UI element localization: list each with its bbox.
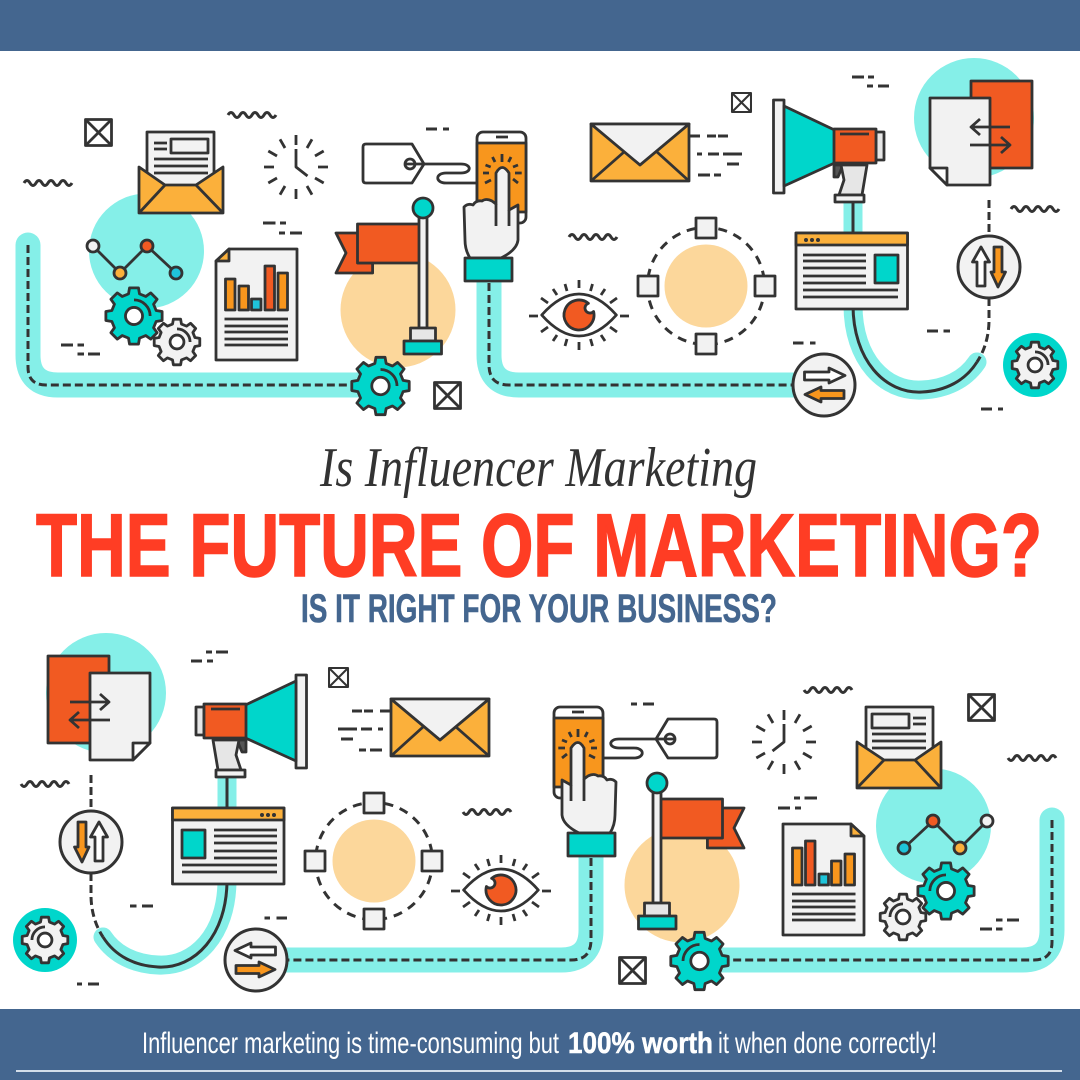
top banner: [0, 0, 1080, 51]
icon: eye: [529, 280, 629, 350]
bottom illustration, mirrored: [13, 633, 1056, 991]
middle connector path: [489, 275, 800, 385]
icon: large teal gear: [106, 288, 162, 344]
bottom banner: [0, 1009, 1080, 1080]
icon: report document with bars: [783, 824, 864, 935]
icon: up down arrows circle: [60, 811, 122, 873]
icon: line chart: [87, 240, 182, 279]
icon: swap arrows circle: [793, 354, 855, 416]
left connector path: [720, 820, 1052, 960]
decorative x boxes: [86, 93, 751, 408]
left connector path: [28, 245, 360, 385]
decorative squiggles: [24, 112, 1059, 240]
icon: gear on path: [352, 357, 409, 415]
icon: network ring: [305, 793, 442, 929]
icon: megaphone: [196, 675, 306, 777]
peach circle behind flag: [340, 252, 456, 368]
teal circle behind chart: [876, 768, 991, 884]
icon: flag on pole: [336, 198, 442, 354]
icon: phone with tapping hand: [554, 707, 616, 856]
icon: line chart: [898, 815, 993, 854]
teal circle behind documents: [46, 633, 166, 753]
decorative x boxes: [329, 668, 994, 984]
icon: small grey gear: [154, 319, 200, 365]
icon: browser window: [172, 808, 284, 884]
icon: eye: [451, 855, 551, 925]
script heading: Is Influencer Marketing: [319, 437, 757, 499]
icon: clock: [752, 710, 816, 774]
icon: gear in teal circle: [13, 908, 77, 972]
icon: megaphone: [774, 100, 884, 202]
subtitle: IS IT RIGHT FOR YOUR BUSINESS?: [301, 587, 777, 631]
right connector path: [853, 200, 989, 392]
teal circle behind chart: [89, 194, 204, 308]
icon: flag on pole: [638, 773, 744, 929]
top illustration: [24, 58, 1067, 416]
decorative dashes: [61, 77, 1003, 409]
icon: open envelope with letter: [857, 707, 941, 788]
icon: swap arrows circle: [225, 929, 287, 991]
footer message: it when done correctly!: [718, 1027, 937, 1060]
footer message: Influencer marketing is time-consuming but: [142, 1027, 559, 1060]
icon: large teal gear: [918, 863, 974, 919]
teal circle behind documents: [914, 58, 1034, 178]
icon: two documents exchange: [48, 656, 150, 760]
icon: open envelope with letter: [139, 132, 223, 213]
icon: network ring: [638, 218, 775, 354]
icon: closed envelope with speed lines: [591, 124, 742, 181]
footer message: 100% worth: [568, 1027, 713, 1060]
icon: small grey gear: [880, 894, 926, 940]
icon: clock: [264, 135, 328, 199]
icon: price tag: [603, 719, 717, 758]
icon: phone with tapping hand: [464, 132, 526, 281]
icon: browser window: [796, 233, 908, 309]
icon: two documents exchange: [930, 81, 1032, 185]
icon: report document with bars: [216, 249, 297, 360]
peach circle behind flag: [624, 828, 740, 942]
icon: gear in teal circle: [1003, 333, 1067, 397]
decorative squiggles: [21, 688, 1056, 814]
middle connector path: [280, 850, 591, 960]
icon: price tag: [363, 144, 477, 183]
right connector path: [91, 775, 227, 967]
icon: gear on path: [671, 932, 728, 990]
decorative dashes: [77, 652, 1019, 984]
icon: up down arrows circle: [958, 236, 1020, 298]
icon: closed envelope with speed lines: [338, 699, 489, 756]
